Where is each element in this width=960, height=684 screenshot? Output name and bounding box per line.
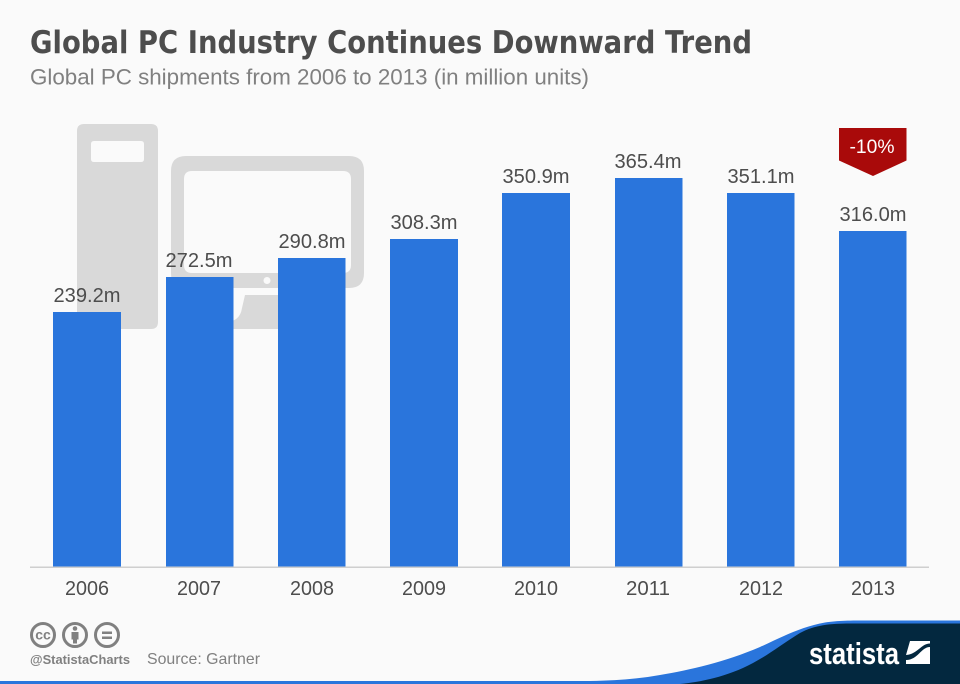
bar: 2008 xyxy=(278,231,346,567)
bar: 2008: 290.8m xyxy=(278,231,346,253)
bar: 2009 xyxy=(390,212,458,567)
bar: 2006 xyxy=(53,285,121,567)
icon: cc: cc xyxy=(35,626,51,642)
credit handle: @StatistaCharts xyxy=(30,652,130,667)
icon: computer monitor xyxy=(171,156,364,329)
bar: 2009: 308.3m xyxy=(390,212,458,234)
bar: 2010: 350.9m xyxy=(502,166,570,188)
x axis line xyxy=(30,566,929,568)
bar: 2007 xyxy=(166,250,234,567)
bar: 2010 xyxy=(502,166,570,567)
icon: attribution xyxy=(64,624,86,646)
x axis labels: 2006 xyxy=(65,578,109,600)
bar: 2013: 316.0m xyxy=(840,204,906,226)
bar: 2012 xyxy=(727,166,794,567)
x axis labels: 2009 xyxy=(402,578,446,600)
bar: 2011 xyxy=(614,151,682,567)
bar: 2013 xyxy=(839,204,906,567)
x axis labels: 2013 xyxy=(851,578,895,600)
x axis labels xyxy=(65,578,895,600)
callout: -10% change: -10% xyxy=(850,137,895,158)
title: Global PC Industry Continues Downward Trend xyxy=(30,25,752,61)
callout: -10% change xyxy=(839,128,906,176)
icon: statista mark xyxy=(906,641,930,664)
bar: 2012: 351.1m xyxy=(728,166,794,188)
bar: 2007: 272.5m xyxy=(166,250,232,272)
icon: no derivatives xyxy=(96,624,118,646)
icon: creative commons licence xyxy=(32,624,118,646)
x axis labels: 2007 xyxy=(177,578,221,600)
bar: 2006: 239.2m xyxy=(54,285,120,307)
statista logo: statista xyxy=(809,636,900,671)
x axis labels: 2011 xyxy=(626,578,670,600)
bar: 2011: 365.4m xyxy=(614,151,682,173)
source: Source: Gartner xyxy=(147,651,261,668)
icon: desktop computer tower xyxy=(77,124,158,329)
x axis labels: 2008 xyxy=(290,578,334,600)
bar chart xyxy=(53,151,906,567)
footer brand wave xyxy=(0,620,960,684)
subtitle: Global PC shipments from 2006 to 2013 (in million units) xyxy=(30,64,589,90)
x axis labels: 2010 xyxy=(514,578,558,600)
x axis labels: 2012 xyxy=(739,578,783,600)
